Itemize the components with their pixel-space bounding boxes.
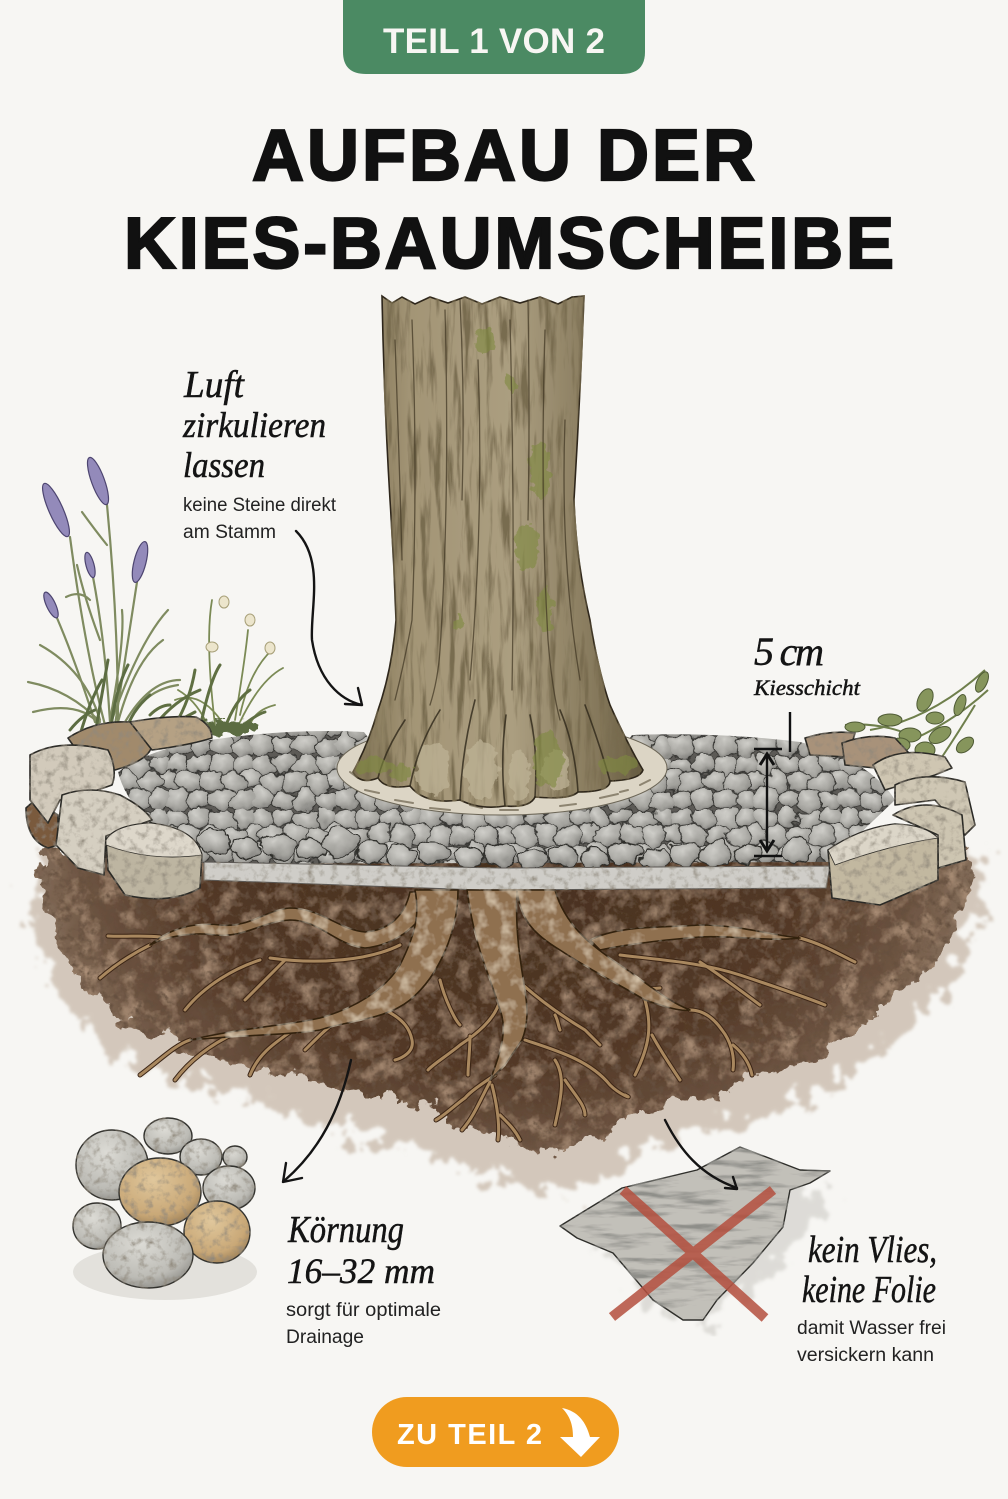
icon: curved arrow down <box>560 1408 600 1457</box>
button: zu Teil 2 <box>372 1397 619 1467</box>
gravel pile illustration <box>73 1118 257 1300</box>
callout: Körnung 16–32 mm: Körnung <box>287 1209 404 1251</box>
callout: kein Vlies, keine Folie: damit Wasser frei <box>797 1318 946 1339</box>
plant: lavender and grass <box>28 455 180 735</box>
callout: Luft zirkulieren lassen: zirkulieren <box>182 405 326 445</box>
red cross <box>612 1190 773 1318</box>
callout: Körnung 16–32 mm: Drainage <box>286 1327 364 1348</box>
blade tuft <box>70 660 150 735</box>
callout: kein Vlies, keine Folie <box>797 1229 946 1366</box>
callout: Luft zirkulieren lassen: Luft <box>183 364 245 406</box>
plant: small flowering herb <box>150 596 283 735</box>
ring dirt flecks <box>350 772 650 810</box>
main root columns <box>150 890 800 1080</box>
callout: Luft zirkulieren lassen: keine Steine direkt <box>183 495 337 516</box>
arrow to fleece <box>665 1120 737 1189</box>
cleared ring around trunk <box>337 721 667 815</box>
pale soil wash <box>30 860 985 1192</box>
grass blades and stems <box>28 505 180 725</box>
callout: 5 cm Kiesschicht: Kiesschicht <box>753 675 861 700</box>
bark furrows <box>395 300 580 720</box>
callout: kein Vlies, keine Folie: keine Folie <box>802 1269 936 1311</box>
back soil stone <box>26 800 58 848</box>
button: zu Teil 2: ZU TEIL 2 <box>397 1419 542 1451</box>
badge: Teil 1 von 2: TEIL 1 VON 2 <box>383 22 605 61</box>
plant: leafy shrub right <box>845 670 991 760</box>
title <box>124 116 894 284</box>
fleece layer under gravel <box>204 862 830 890</box>
moss on trunk <box>357 327 638 788</box>
callout: Luft zirkulieren lassen: lassen <box>183 445 265 485</box>
callout: 5 cm Kiesschicht: 5 cm <box>754 629 824 674</box>
thin root branches <box>100 936 855 1140</box>
tree trunk <box>353 296 643 807</box>
title: KIES-BAUMSCHEIBE <box>124 204 894 284</box>
callout: 5 cm Kiesschicht <box>753 629 861 700</box>
fleece crossed out illustration <box>560 1147 835 1325</box>
roots <box>100 890 855 1140</box>
arrow to Körnung <box>283 1060 351 1182</box>
badge: Teil 1 von 2 <box>343 0 645 74</box>
callout: kein Vlies, keine Folie: versickern kann <box>797 1345 934 1366</box>
title: AUFBAU DER <box>252 116 755 196</box>
callout: Körnung 16–32 mm: sorgt für optimale <box>286 1300 441 1321</box>
callout: Körnung 16–32 mm: 16–32 mm <box>287 1251 435 1291</box>
gravel layer <box>118 731 894 864</box>
callout: Körnung 16–32 mm <box>286 1209 441 1348</box>
soil cross-section <box>42 850 968 1153</box>
callout: Luft zirkulieren lassen: am Stamm <box>183 522 276 543</box>
callout: Luft zirkulieren lassen <box>182 364 337 543</box>
arrow to trunk base <box>296 531 362 705</box>
lavender blossoms <box>38 455 151 620</box>
border stones right <box>805 732 975 905</box>
lobe dividing lines <box>378 700 610 806</box>
front row of gravel <box>199 828 810 869</box>
border stones left <box>26 717 212 899</box>
callout: kein Vlies, keine Folie: kein Vlies, <box>808 1229 937 1271</box>
lobes of trunk flare <box>416 740 570 801</box>
measure bracket 5 cm <box>754 712 790 856</box>
